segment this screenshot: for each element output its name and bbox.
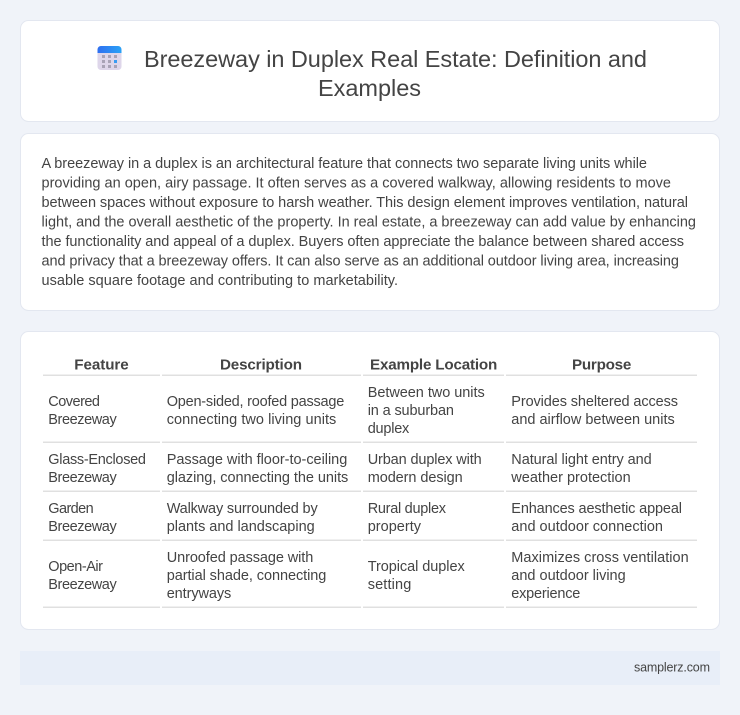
table row: garden breezeway: Rural duplex (368, 501, 447, 517)
table row: covered breezeway: duplex (368, 421, 410, 437)
table row: covered breezeway: and airflow between units (511, 412, 675, 428)
table row: garden breezeway: Enhances aesthetic appeal (511, 501, 682, 517)
table row: covered breezeway: Covered (48, 394, 100, 410)
table row: glass-enclosed breezeway: Urban duplex with (368, 452, 482, 468)
table row: covered breezeway: connecting two living units (167, 412, 336, 428)
text block: introduction paragraph: usable square footage and contributing to marketability. (42, 273, 398, 289)
table row: garden breezeway: property (368, 519, 422, 535)
table row: garden breezeway (43, 501, 697, 541)
text block: introduction paragraph: light, and the overall aesthetic of the property. In real estate, a breezeway can add value by enhancing (42, 214, 696, 230)
table row: glass-enclosed breezeway: Breezeway (48, 470, 117, 486)
text block: introduction paragraph: the functionality and appeal of a duplex. Buyers often appreciate the balance between shared access (42, 234, 684, 250)
table row: open-air breezeway: Breezeway (48, 577, 117, 593)
table row: open-air breezeway: entryways (167, 586, 231, 602)
title: Breezeway in Duplex Real Estate: Definition and (144, 46, 647, 72)
table header row: Description (220, 356, 302, 373)
title (144, 46, 647, 101)
table row: garden breezeway: plants and landscaping (167, 519, 315, 535)
table row: open-air breezeway (43, 550, 697, 608)
icon: calendar (98, 46, 122, 70)
text block: introduction paragraph: between spaces without exposure to harsh weather. This design element improves ventilation, natural (42, 195, 688, 211)
table row: covered breezeway: in a suburban (368, 403, 454, 419)
table row: open-air breezeway: Open-Air (48, 559, 103, 575)
table header row: Purpose (572, 356, 631, 373)
table row: garden breezeway: Garden (48, 501, 94, 517)
table row: garden breezeway: Breezeway (48, 519, 117, 535)
panel: table card (20, 332, 720, 630)
table row: covered breezeway: Open-sided, roofed passage (167, 394, 344, 410)
panel: introduction card (20, 134, 720, 310)
table row: glass-enclosed breezeway: Passage with floor-to-ceiling (167, 452, 347, 468)
text block: introduction paragraph: and privacy that a breezeway offers. It can also serve as an additional outdoor living area, increasing (42, 254, 679, 270)
table row: garden breezeway: Walkway surrounded by (167, 501, 318, 517)
table row: covered breezeway (43, 385, 697, 443)
text block: introduction paragraph: providing an open, airy passage. It often serves as a covered walkway, allowing residents to move (42, 176, 671, 192)
table row: open-air breezeway: Unroofed passage with (167, 550, 313, 566)
table row: open-air breezeway: Maximizes cross ventilation (511, 550, 689, 566)
table row: glass-enclosed breezeway (43, 452, 697, 492)
table header row: Feature (74, 356, 129, 373)
footer text: site name: samplerz.com (634, 661, 710, 675)
table row: open-air breezeway: partial shade, connecting (167, 568, 326, 584)
text block: introduction paragraph (42, 156, 696, 289)
table row: glass-enclosed breezeway: weather protection (510, 470, 631, 486)
table row: open-air breezeway: and outdoor living (511, 568, 626, 584)
table row: covered breezeway: Between two units (368, 385, 485, 401)
table row: glass-enclosed breezeway: modern design (368, 470, 463, 486)
table row: glass-enclosed breezeway: glazing, connecting the units (167, 470, 348, 486)
footer bar (20, 651, 720, 685)
table row: open-air breezeway: experience (511, 586, 580, 602)
table row: garden breezeway: and outdoor connection (511, 519, 663, 535)
table header row (43, 356, 697, 376)
table row: covered breezeway: Provides sheltered access (511, 394, 678, 410)
table header row: Example Location (370, 356, 497, 373)
table row: glass-enclosed breezeway: Natural light entry and (511, 452, 652, 468)
title: Examples (318, 75, 421, 101)
table row: open-air breezeway: Tropical duplex (368, 559, 465, 575)
text block: introduction paragraph: A breezeway in a duplex is an architectural feature that connects two separate living units while (42, 156, 647, 172)
panel: header card (20, 20, 720, 122)
table row: covered breezeway: Breezeway (48, 412, 117, 428)
table row: glass-enclosed breezeway: Glass-Enclosed (48, 452, 146, 468)
table: breezeway types (43, 356, 697, 608)
table row: open-air breezeway: setting (368, 577, 411, 593)
